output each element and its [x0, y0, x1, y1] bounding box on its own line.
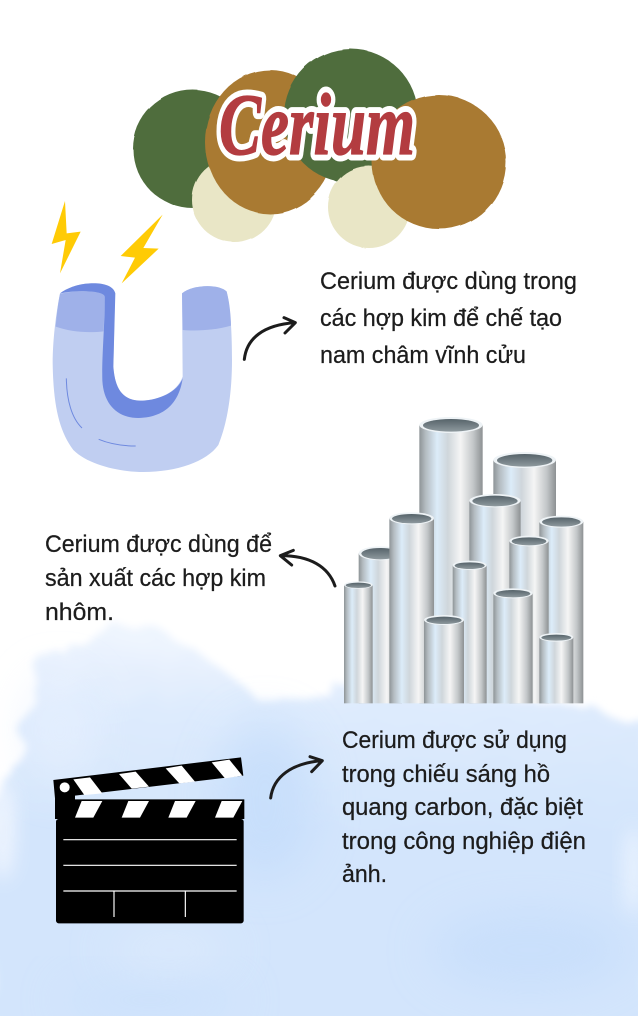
text: aluminium alloys: sản xuất các hợp kim [45, 565, 266, 592]
title cluster: painted circles [133, 49, 506, 248]
title: Cerium [219, 77, 415, 174]
icon: horseshoe magnet [53, 283, 232, 472]
icon: lightning bolts [52, 201, 163, 283]
text: carbon arc lighting [342, 727, 586, 888]
text: aluminium alloys: nhôm. [45, 599, 114, 626]
icon: aluminium tubes [344, 417, 583, 703]
text: aluminium alloys [45, 531, 272, 626]
text: aluminium alloys: Cerium được dùng để [45, 531, 272, 558]
text: carbon arc lighting: trong chiếu sáng hồ [342, 761, 550, 788]
text: permanent magnets: các hợp kim để chế tạo [320, 305, 562, 332]
text: permanent magnets: nam châm vĩnh cửu [320, 342, 526, 369]
arrow: tubes to text [280, 550, 335, 586]
text: permanent magnets [320, 268, 577, 369]
title: Cerium [219, 77, 415, 174]
text: carbon arc lighting: quang carbon, đặc biệt [342, 794, 583, 821]
arrow: magnet to text [244, 318, 295, 359]
icon: film clapperboard [53, 757, 244, 923]
text: permanent magnets: Cerium được dùng trong [320, 268, 577, 295]
arrow: clapperboard to text [271, 757, 322, 798]
text: carbon arc lighting: ảnh. [342, 861, 387, 888]
text: carbon arc lighting: Cerium được sử dụng [342, 727, 567, 754]
text: carbon arc lighting: trong công nghiệp điện [342, 828, 586, 855]
